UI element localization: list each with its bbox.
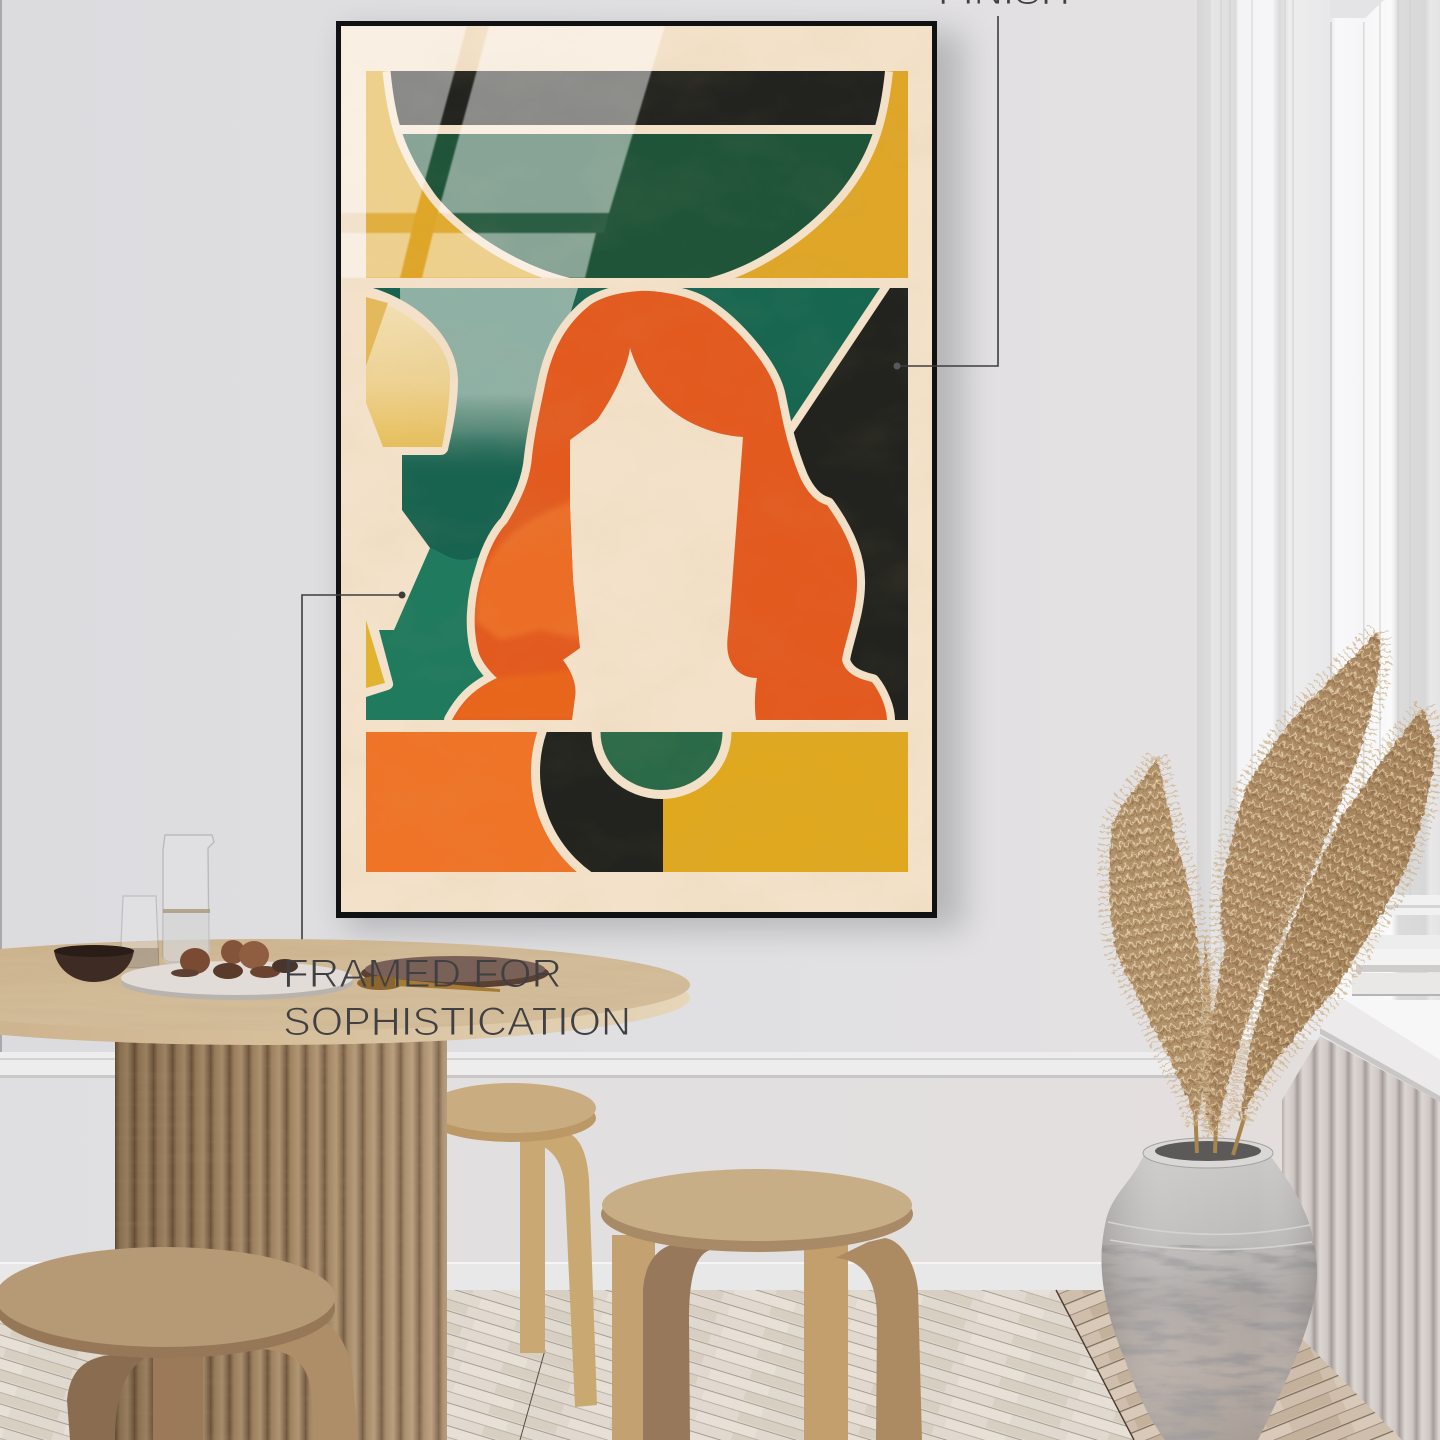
yellow blob reflection streak [366, 297, 388, 366]
wooden tray [361, 956, 549, 988]
pampas grass [1109, 633, 1435, 1155]
callout leader: finish [894, 16, 998, 370]
label: framed for sophistication: SOPHISTICATION [283, 1000, 631, 1044]
cream semicircle outline [592, 732, 732, 799]
orange hair figure [450, 291, 887, 720]
poster paper [341, 26, 932, 912]
chair rail moulding [0, 1052, 1180, 1078]
black frame [336, 21, 937, 918]
orange block [366, 732, 577, 872]
top band: bowl outline [390, 71, 885, 278]
middle band: lighter green lower field [366, 548, 500, 720]
baseboard [0, 1262, 1120, 1290]
stool: back [428, 1083, 597, 1407]
label: framed for sophistication [283, 952, 631, 1044]
vase [1102, 1138, 1317, 1440]
stack of books on sill [1350, 935, 1440, 996]
pale yellow blob [366, 297, 450, 447]
poster shadow [346, 32, 964, 930]
glass carafe [163, 835, 214, 964]
plume: small [1201, 937, 1222, 1135]
radiator [1282, 1036, 1440, 1440]
window frame [1197, 0, 1440, 1040]
cream figure left [358, 286, 458, 697]
bottom band [366, 732, 908, 872]
top band: yellow corners [366, 71, 908, 278]
green semicircle [600, 732, 722, 790]
walnuts on plate [171, 940, 298, 979]
callout leader: framed [302, 592, 406, 947]
dark wooden bowl [54, 945, 134, 982]
window sill [1320, 1000, 1440, 1102]
glass window reflection [341, 26, 665, 278]
bowl: green body and black rim [380, 71, 900, 278]
stool: front left [0, 1247, 358, 1440]
middle band: black field [792, 288, 908, 720]
wooden spoon [357, 976, 500, 992]
table pedestal [115, 1035, 447, 1440]
small yellow triangle [366, 620, 385, 688]
label: framed for sophistication: FRAMED FOR [283, 952, 562, 996]
middle band: green left field [366, 288, 640, 720]
table top [0, 935, 700, 1045]
cream arc outline [531, 732, 592, 872]
plume: left [1109, 758, 1205, 1125]
stool: front right [601, 1169, 922, 1440]
middle band: glass reflection on green [400, 288, 578, 480]
black arc [540, 732, 663, 872]
hair lighter watercolor wash [450, 500, 585, 720]
yellow block [663, 732, 908, 872]
herringbone floor [0, 1290, 1420, 1440]
marble plate [121, 961, 353, 1000]
stems [1195, 1100, 1245, 1155]
hair silhouette [452, 291, 887, 720]
drinking glass [120, 896, 159, 968]
paper watercolor texture [341, 26, 932, 912]
middle band: green right triangle [660, 288, 880, 423]
wall under window [1180, 1040, 1320, 1290]
framed poster [336, 21, 937, 918]
plume: right [1240, 710, 1435, 1120]
plume: middle [1209, 633, 1380, 1135]
